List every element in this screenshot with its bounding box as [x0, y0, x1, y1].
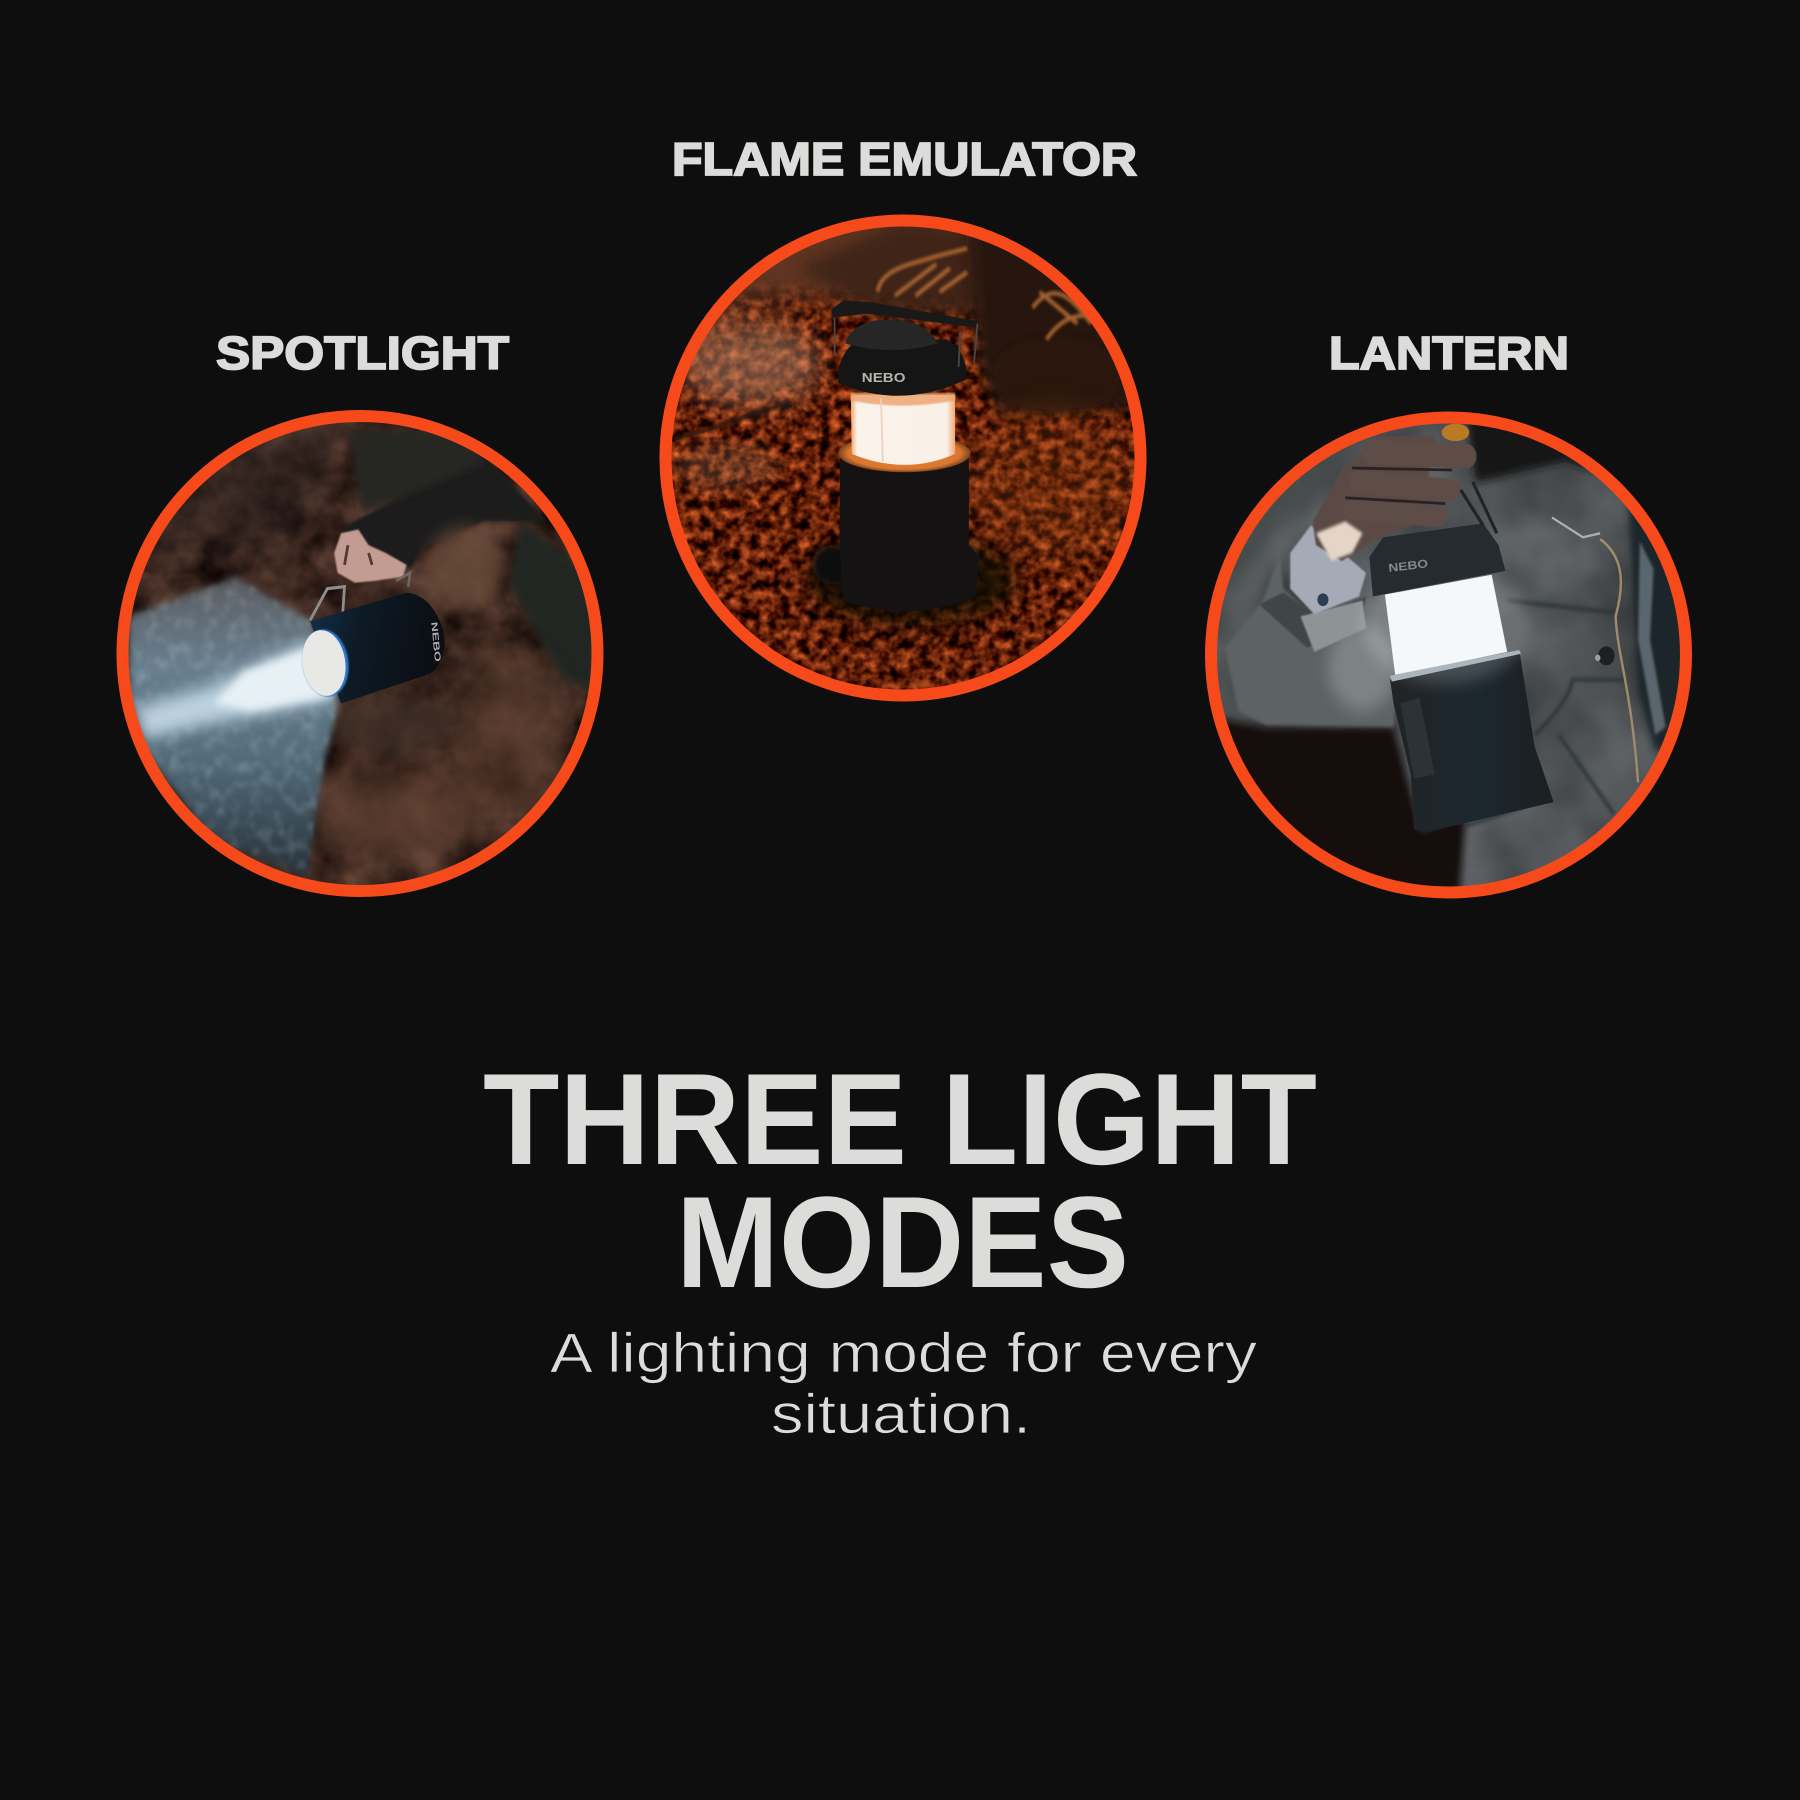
icon: hand gripping handle [1313, 424, 1469, 561]
icon: boot laces [878, 248, 1091, 339]
icon: jacket sleeve and shirt cuff [1225, 525, 1400, 727]
icon: bright white lantern [1363, 482, 1554, 832]
subtitle [550, 1321, 1257, 1445]
infographic canvas [116, 142, 1692, 1434]
panel: lantern mode [1201, 327, 1695, 901]
beam haze [129, 577, 338, 877]
ring: spotlight [122, 416, 598, 891]
title: THREE LIGHT [483, 1046, 1317, 1192]
icon: cylindrical spotlight body [297, 593, 445, 703]
photo: hand holding lit lantern [1217, 424, 1680, 886]
icon: jacket zipper [1600, 539, 1638, 782]
photo: spotlight beam in woods [128, 422, 592, 885]
heading: flame emulator: FLAME EMULATOR [672, 133, 1137, 185]
icon: glowing orange lantern: NEBO [862, 370, 906, 385]
panel: spotlight mode [110, 327, 610, 910]
heading: spotlight: SPOTLIGHT [216, 327, 509, 379]
icon: hand on lantern handle [310, 529, 410, 620]
photo: lantern on forest floor [672, 226, 1134, 690]
ring: flame emulator [666, 220, 1140, 696]
title: MODES [676, 1169, 1129, 1315]
title [483, 1046, 1317, 1315]
icon: glowing orange lantern [805, 301, 1019, 626]
icon: jacket folds [1466, 601, 1624, 826]
subtitle: A lighting mode for every [550, 1321, 1257, 1384]
icon: bright white lantern: NEBO [1388, 556, 1429, 575]
panel: flame emulator mode [654, 133, 1177, 710]
icon: cylindrical spotlight body: NEBO [429, 621, 442, 662]
subtitle: situation. [771, 1382, 1031, 1445]
ring: lantern [1211, 418, 1686, 892]
heading: lantern: LANTERN [1329, 327, 1569, 379]
